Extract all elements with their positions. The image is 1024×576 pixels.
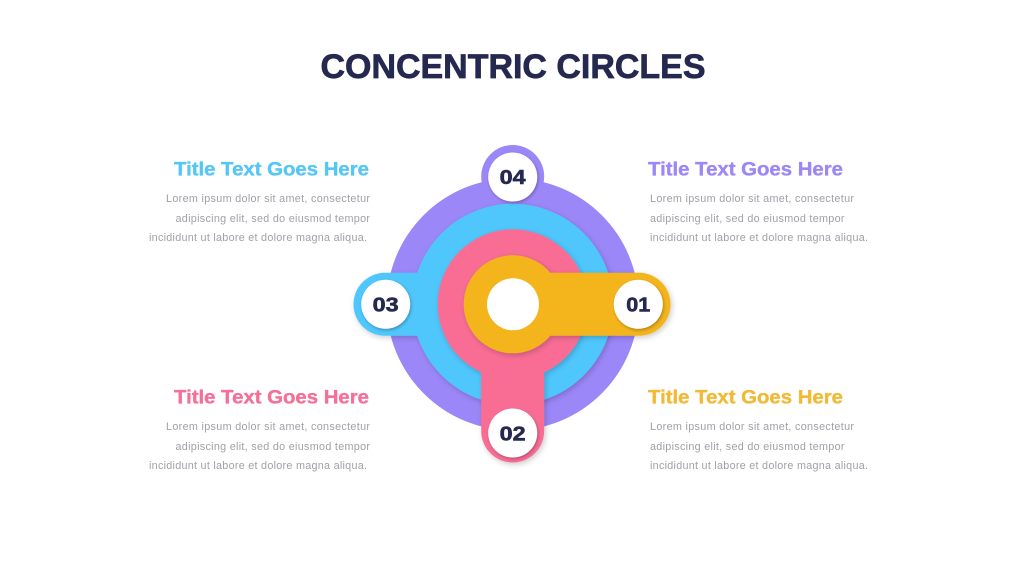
concentric circles diagram [354, 145, 670, 463]
text block: top right: Title Text Goes Here [648, 160, 843, 180]
text block: bottom right [648, 388, 868, 472]
text block: top left: incididunt ut labore et dolore magna aliqua. [149, 232, 367, 244]
text block: top right: incididunt ut labore et dolore magna aliqua. [650, 232, 868, 244]
text block: bottom right: adipiscing elit, sed do eiusmod tempor [650, 441, 845, 453]
text block: bottom left: incididunt ut labore et dolore magna aliqua. [149, 460, 367, 472]
badge 02 [488, 408, 537, 458]
text block: top left: Lorem ipsum dolor sit amet, consectetur [166, 193, 370, 205]
ring 03: blue [354, 204, 613, 405]
text block: top right: adipiscing elit, sed do eiusmod tempor [650, 213, 845, 225]
badge 02: 02 [500, 422, 526, 446]
text block: bottom left [149, 388, 370, 472]
text block: bottom right: incididunt ut labore et dolore magna aliqua. [650, 460, 868, 472]
text block: top right: Lorem ipsum dolor sit amet, consectetur [650, 193, 854, 205]
title: CONCENTRIC CIRCLES [320, 48, 706, 86]
badge 01: 01 [626, 293, 650, 316]
badge 03 [361, 280, 410, 329]
center hole [487, 278, 539, 330]
badge 04 [488, 152, 537, 202]
text block: bottom left: Lorem ipsum dolor sit amet, consectetur [166, 421, 370, 433]
badge 01 [614, 280, 663, 329]
text block: bottom left: Title Text Goes Here [174, 388, 369, 408]
text block: bottom right: Title Text Goes Here [648, 388, 843, 408]
ring 02: pink [438, 229, 588, 463]
text block: top left: adipiscing elit, sed do eiusmod tempor [176, 213, 370, 225]
text block: top left: Title Text Goes Here [174, 160, 369, 180]
badge 04: 04 [500, 166, 526, 189]
text block: top left [149, 160, 370, 244]
text block: bottom right: Lorem ipsum dolor sit amet, consectetur [650, 421, 854, 433]
text block: bottom left: adipiscing elit, sed do eiusmod tempor [176, 441, 370, 453]
ring 01: yellow [464, 255, 670, 353]
badge 03: 03 [373, 293, 399, 316]
text block: top right [648, 160, 868, 244]
ring 04: purple [387, 145, 639, 430]
